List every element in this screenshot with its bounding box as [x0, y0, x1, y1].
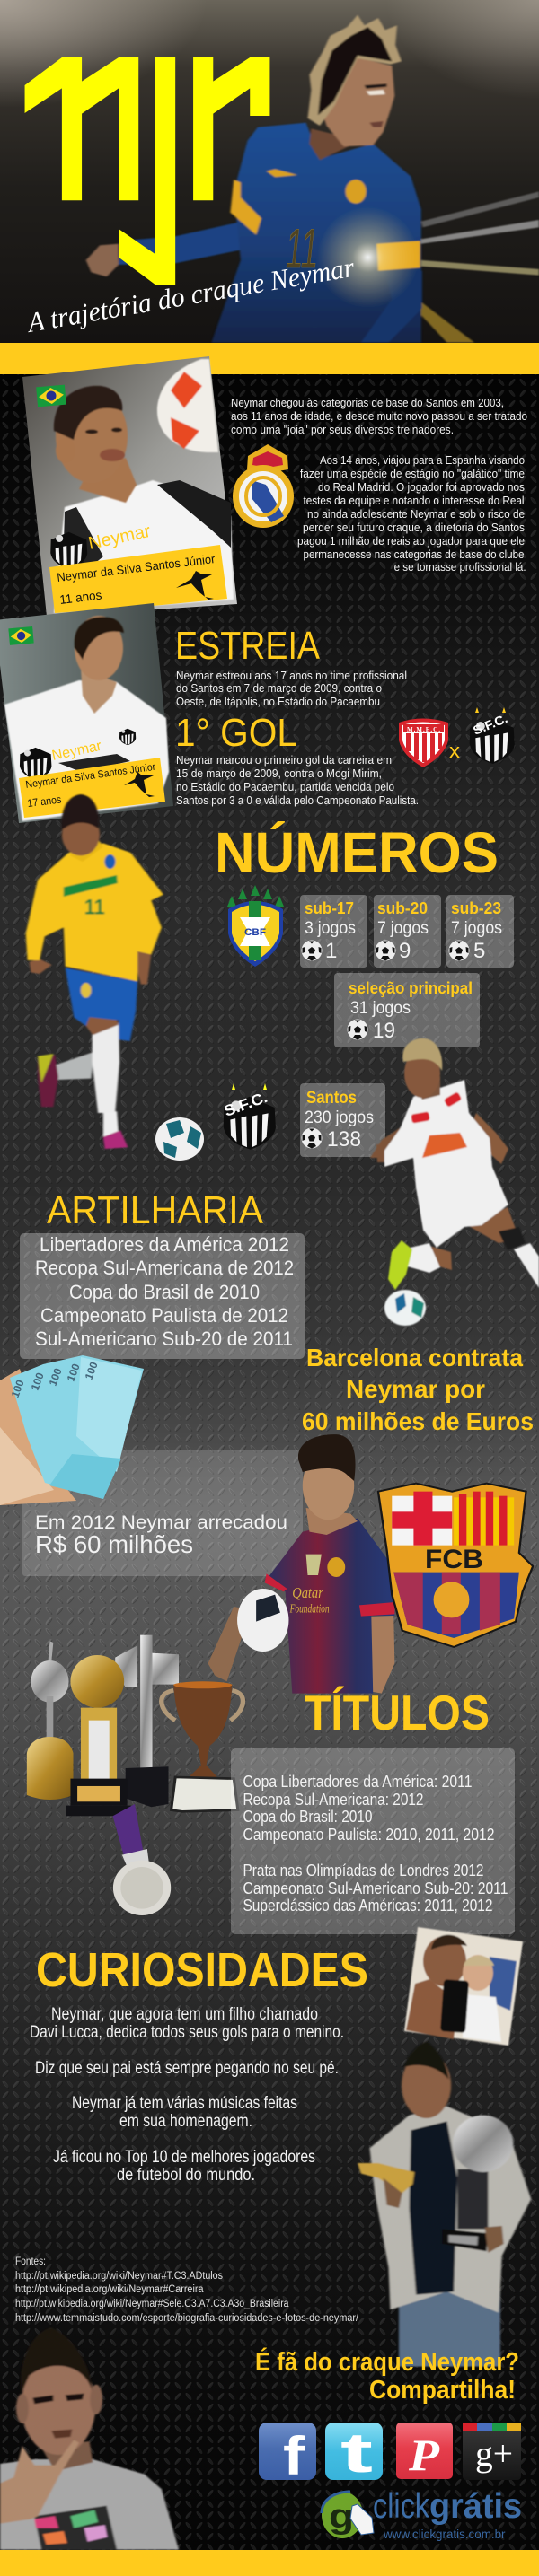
- sources: http://www.temmaistudo.com/esporte/biografia-curiosidades-e-fotos-de-neymar/: [15, 2313, 359, 2324]
- yellow label: [49, 545, 227, 613]
- panel: titles list: Campeonato Sul-Americano Sub-20: 2011: [243, 1879, 508, 1897]
- panel: titles list: Recopa Sul-Americana: 2012: [243, 1791, 424, 1809]
- panel: seleção principal: seleção principal: [349, 979, 473, 997]
- panel: earnings: R$ 60 milhões: [35, 1530, 193, 1558]
- callout: Barcelona transfer: Barcelona contrata: [306, 1344, 523, 1371]
- card name: Neymar: [50, 739, 103, 764]
- panel: top scorer list: Copa do Brasil de 2010: [69, 1281, 260, 1303]
- NJR logo: [25, 57, 270, 285]
- call to action: Compartilha!: [369, 2376, 516, 2405]
- player in yellow Brazil shirt: [26, 794, 163, 1149]
- heading: ESTREIA: ESTREIA: [175, 624, 321, 668]
- yellow label: [19, 758, 165, 818]
- icon: Santos badge: [222, 1083, 276, 1150]
- card background: [0, 603, 173, 823]
- panel: Santos: 230 jogos: [305, 1108, 374, 1127]
- text block: Real Madrid: do Real Madrid. O jogador foi aprovado nos: [318, 481, 525, 494]
- text block: base categories: como uma "joia" por seus diversos treinadores.: [231, 424, 454, 436]
- panel: sub-23: [446, 895, 514, 968]
- header photo background: [0, 0, 539, 343]
- sources: [15, 2256, 359, 2324]
- text block: Real Madrid: Aos 14 anos, viajou para a Espanha visando: [320, 454, 525, 467]
- icon: Google Plus: [463, 2423, 521, 2480]
- text block: debut: Oeste, de Itápolis, no Estádio do Pacaembu: [176, 696, 380, 708]
- icon: Twitter: t: [340, 2423, 373, 2484]
- trophy: copper cup: [162, 1681, 243, 1811]
- icon: Santos badge: [20, 748, 51, 780]
- callout: Barcelona transfer: Neymar por: [346, 1375, 485, 1403]
- hero player: Neymar in blue Brazil shirt: [86, 15, 539, 343]
- heading: 1° GOL: 1° GOL: [175, 711, 297, 755]
- panel: top scorer list: Recopa Sul-Americana de 2012: [35, 1257, 294, 1279]
- footer player pointing: [0, 2327, 179, 2550]
- text block: first goal: 15 de março de 2009, contra o Mogi Mirim,: [176, 767, 382, 780]
- sources: http://pt.wikipedia.org/wiki/Neymar#Carreira: [15, 2284, 204, 2295]
- text block: Real Madrid: permanecesse nas categorias de base do clube: [304, 548, 525, 561]
- heading: TÍTULOS: TÍTULOS: [305, 1685, 490, 1740]
- text block: base categories: Neymar chegou às categorias de base do Santos em 2003,: [231, 397, 504, 409]
- boy head: [54, 386, 137, 503]
- text block: debut: do Santos em 7 de março de 2009, contra o: [176, 682, 382, 695]
- icon: banknotes fan: 100: [47, 1366, 65, 1388]
- panel: titles list: Campeonato Paulista: 2010, 2011, 2012: [243, 1826, 494, 1844]
- icon: CBF badge: CBF: [244, 927, 266, 938]
- shirt number 11: 11: [286, 218, 318, 280]
- text block: curiosities: Davi Lucca, dedica todos seus gols para o menino.: [30, 2023, 344, 2042]
- text block: curiosities: Neymar, que agora tem um filho chamado: [51, 2005, 318, 2024]
- text block: base categories: [231, 397, 527, 436]
- panel: earnings: Em 2012 Neymar arrecadou: [35, 1512, 287, 1533]
- text block: base categories: aos 11 anos de idade, e desde muito novo passou a ser tratado: [231, 410, 527, 423]
- panel: seleção principal: 19: [373, 1019, 395, 1043]
- bottom yellow band: [0, 2550, 539, 2576]
- icon: Santos badge: S.F.C.: [222, 1089, 270, 1120]
- panel: sub-20: 9: [399, 939, 411, 963]
- icon: banknotes fan: 100: [83, 1360, 101, 1381]
- icon: Barcelona badge: [378, 1484, 533, 1647]
- panel: titles list: Prata nas Olimpíadas de Londres 2012: [243, 1862, 483, 1879]
- text block: Real Madrid: e se tornasse profissional lá.: [394, 561, 526, 574]
- panel: top scorer list: Campeonato Paulista de 2012: [40, 1304, 288, 1327]
- text block: Real Madrid: pagou 1 milhão de reais ao jogador para que ele: [297, 535, 525, 548]
- ball: [155, 1117, 204, 1161]
- logo: clickgrátis: g: [329, 2498, 354, 2536]
- text block: Real Madrid: [297, 454, 526, 574]
- text block: curiosities: Já ficou no Top 10 de melhores jogadores: [53, 2148, 315, 2167]
- panel: seleção principal: 31 jogos: [350, 999, 411, 1018]
- player in Barcelona shirt with ball: Foundation: [289, 1603, 330, 1616]
- icon: Pinterest: [396, 2423, 453, 2480]
- icon: banknotes fan: 100: [9, 1378, 27, 1399]
- player in white Santos shirt with ball: [370, 1038, 539, 1326]
- panel: sub-20: [374, 895, 441, 968]
- text block: debut: Neymar estreou aos 17 anos no time profissional: [176, 670, 407, 682]
- panel: earnings: [22, 1450, 303, 1576]
- panel: sub-17: [300, 895, 367, 968]
- head: [75, 616, 124, 714]
- icon: Mogi Mirim badge: M.M.E.C.: [407, 726, 440, 733]
- ball: [157, 359, 218, 452]
- text block: first goal: Santos por 3 a 0 e válida pelo Campeonato Paulista.: [176, 794, 419, 807]
- panel: titles list: Copa do Brasil: 2010: [243, 1808, 372, 1826]
- panel: seleção principal: [334, 973, 480, 1047]
- panel: titles list: Superclássico das Américas: 2011, 2012: [243, 1897, 492, 1914]
- icon: banknotes fan: 100: [65, 1362, 83, 1383]
- card background: [22, 356, 237, 617]
- panel: sub-17: 1: [325, 939, 337, 963]
- icon: Brazil flag: [36, 385, 66, 407]
- text block: curiosities: Diz que seu pai está sempre pegando no seu pé.: [35, 2059, 339, 2078]
- card: Neymar at 11: [22, 356, 237, 617]
- trophy: silver flag: [115, 1635, 179, 1807]
- panel: sub-20: 7 jogos: [377, 919, 429, 938]
- icon: Pinterest: P: [408, 2430, 440, 2480]
- player in Barcelona shirt with ball: Qatar: [292, 1584, 323, 1602]
- icon: shirt crest: [119, 729, 136, 745]
- icon: Real Madrid badge: [233, 444, 294, 528]
- icon: player silhouette: [176, 571, 214, 600]
- icon: Facebook: f: [283, 2426, 305, 2486]
- panel: sub-20: sub-20: [377, 899, 428, 917]
- text block: curiosities: Neymar já tem várias músicas feitas: [72, 2094, 297, 2113]
- trophies: [27, 1635, 243, 1915]
- heading: CURIOSIDADES: CURIOSIDADES: [36, 1943, 368, 1997]
- panel: Santos: [300, 1083, 385, 1157]
- icon: Brazil flag: [8, 626, 34, 645]
- label name: Neymar da Silva Santos Júnior: [57, 552, 216, 584]
- top yellow band: [0, 343, 539, 374]
- text block: debut: [176, 670, 407, 708]
- panel: sub-23: sub-23: [451, 899, 501, 917]
- icon: CBF badge: [227, 885, 284, 967]
- panel: titles list: Copa Libertadores da América: 2011: [243, 1773, 473, 1791]
- text block: first goal: no Estádio do Pacaembu, partida vencida pelo: [176, 781, 394, 793]
- card: Neymar at 17: [0, 603, 173, 823]
- player with awards in grey jacket: [358, 2042, 531, 2367]
- text block: Real Madrid: fazer uma espécie de estágio no "galático" time: [300, 468, 525, 480]
- logo: clickgrátis: click: [373, 2487, 429, 2526]
- photo: selfie with son: [404, 1927, 523, 2046]
- text block: curiosities: em sua homenagem.: [119, 2112, 252, 2131]
- shirt: [4, 680, 169, 821]
- player in Barcelona shirt with ball: [208, 1434, 394, 1694]
- shirt: [54, 480, 234, 613]
- panel: top scorer list: [20, 1233, 305, 1359]
- tagline: A trajetória do craque Neymar: [23, 251, 358, 338]
- text block: first goal: Neymar marcou o primeiro gol da carreira em: [176, 754, 392, 767]
- text block: curiosities: de futebol do mundo.: [117, 2166, 255, 2185]
- icon: Google Plus: g+: [475, 2433, 513, 2474]
- text block: first goal: [176, 754, 419, 807]
- sources: http://pt.wikipedia.org/wiki/Neymar#Sele.C3.A7.C3.A3o_Brasileira: [15, 2299, 289, 2309]
- icon: Barcelona badge: FCB: [425, 1545, 483, 1574]
- text block: Real Madrid: testes da equipe e notando o interesse do Real: [304, 495, 525, 507]
- icon: Santos badge: [50, 532, 87, 569]
- panel: sub-23: 5: [473, 939, 485, 963]
- panel: sub-23: 7 jogos: [451, 919, 502, 938]
- logo: clickgrátis: grátis: [429, 2487, 522, 2526]
- label age: 11 anos: [58, 588, 102, 607]
- call to action: [255, 2346, 519, 2405]
- trophy: gold ball: [66, 1655, 131, 1816]
- text block: Real Madrid: no ainda adolescente Neymar e sob o risco de: [307, 508, 525, 521]
- icon: Twitter: [325, 2423, 383, 2484]
- panel: Santos: Santos: [306, 1089, 357, 1108]
- player in yellow Brazil shirt: 11: [84, 896, 105, 919]
- medal: [113, 1804, 171, 1915]
- text block: curiosities: [30, 2005, 344, 2185]
- panel: top scorer list: Libertadores da América 2012: [40, 1233, 289, 1256]
- trophy: silver Libertadores: [27, 1641, 74, 1800]
- card name: Neymar: [86, 521, 153, 554]
- icon: Facebook: [259, 2423, 316, 2486]
- panel: titles list: [231, 1748, 515, 1934]
- panel: Santos: 138: [327, 1127, 361, 1152]
- heading: NÚMEROS: NÚMEROS: [215, 820, 499, 885]
- logo: clickgrátis: www.clickgratis.com.br: [383, 2527, 506, 2541]
- callout: Barcelona transfer: [302, 1344, 534, 1435]
- icon: player silhouette: [124, 772, 155, 797]
- versus x: x: [449, 740, 460, 762]
- icon: banknotes fan: 100: [29, 1371, 47, 1392]
- icon: Santos badge: S.F.C.: [471, 711, 509, 738]
- black number: [58, 754, 130, 772]
- label age: 17 anos: [27, 793, 62, 810]
- panel: sub-17: 3 jogos: [305, 919, 356, 938]
- sources: Fontes:: [15, 2256, 46, 2267]
- panel: sub-17: sub-17: [305, 899, 354, 917]
- panel: top scorer list: Sul-Americano Sub-20 de 2011: [35, 1327, 293, 1350]
- text block: Real Madrid: perder seu futuro craque, a diretoria do Santos: [303, 521, 525, 534]
- logo: clickgrátis: [322, 2487, 522, 2541]
- heading: ARTILHARIA: ARTILHARIA: [47, 1188, 264, 1232]
- icon: Santos badge: [470, 707, 515, 764]
- icon: Mogi Mirim badge: [399, 718, 448, 767]
- icon: banknotes fan: [0, 1355, 144, 1505]
- sources: http://pt.wikipedia.org/wiki/Neymar#T.C3.ADtulos: [15, 2271, 223, 2282]
- label name: Neymar da Silva Santos Júnior: [25, 762, 156, 791]
